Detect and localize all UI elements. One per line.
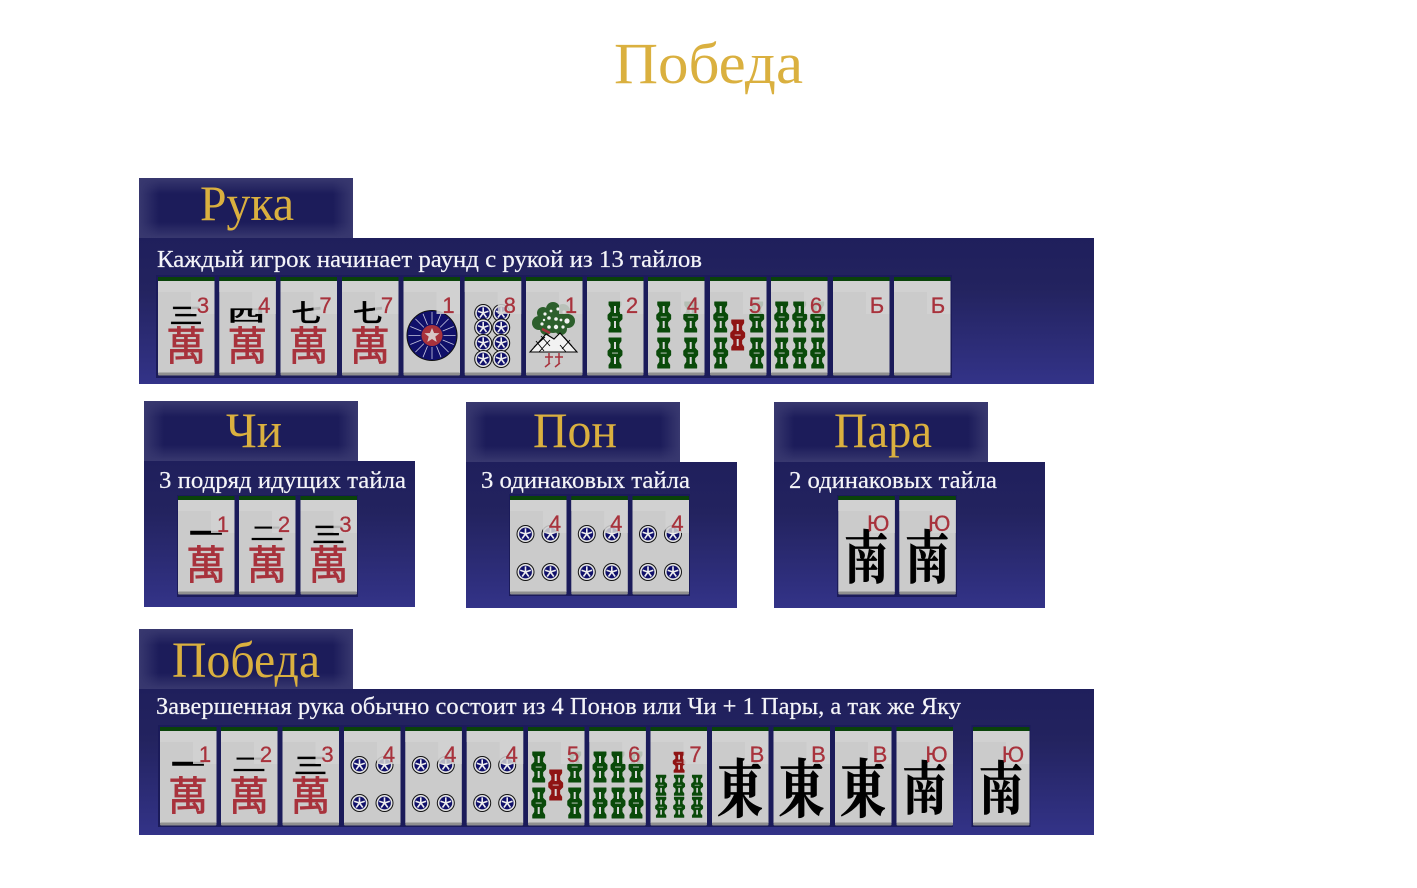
tile: 3 man: 三: [312, 518, 345, 549]
tile: 2 sou: [587, 277, 644, 376]
tile: east wind: 東: [717, 739, 763, 830]
tile: 2 man: 萬: [247, 533, 287, 591]
tile: 3 man: 萬: [308, 533, 348, 591]
tile: 4 man: 萬: [227, 314, 267, 372]
tile: east wind: В: [811, 742, 826, 767]
tile: 4 pin: 4: [671, 511, 684, 536]
tile: 7 man: 七: [291, 293, 322, 329]
pon tab heading: Пон: [533, 402, 617, 458]
tile: 6 sou: 6: [810, 293, 822, 318]
tile: east wind: 東: [778, 739, 825, 830]
tile: 7 man: 萬: [288, 314, 328, 372]
tile: south wind: [838, 496, 895, 595]
tile: 1 pin: 1: [442, 293, 455, 318]
tile: 5 sou: [710, 277, 766, 376]
tile: south wind: [896, 727, 953, 826]
tile: 4 pin: [571, 496, 628, 594]
pon description: 3 одинаковых тайла: [481, 468, 690, 494]
tile: 7 man: 七: [353, 293, 383, 329]
tile: 7 man: [342, 277, 398, 376]
tile: 4 pin: [344, 727, 400, 826]
tile: 3 man: [300, 496, 357, 594]
tile: 4 pin: 4: [610, 511, 622, 536]
tile: 7 man: [280, 277, 337, 376]
tile: 1 pin: [404, 277, 460, 376]
win tab heading: Победа: [172, 633, 320, 689]
tile: 4 pin: 4: [383, 742, 395, 767]
tile: east wind: В: [873, 742, 887, 767]
tile: 3 man: [282, 727, 339, 826]
tile: 4 pin: [632, 496, 689, 594]
tile: 2 man: 萬: [229, 764, 269, 822]
chi tab heading: Чи: [226, 402, 282, 458]
tile: blank: [833, 277, 890, 376]
tile: 1 man: 1: [199, 742, 211, 767]
tile: 2 man: 2: [260, 742, 272, 767]
tile: 2 sou: 2: [626, 293, 638, 318]
tile: 1 man: 1: [217, 512, 229, 537]
tile: 4 pin: 4: [549, 511, 561, 536]
pair tab heading: [774, 402, 988, 462]
tile: 1 man: 萬: [168, 764, 208, 822]
tile: east wind: 東: [840, 739, 886, 830]
pair description: 2 одинаковых тайла: [789, 468, 997, 494]
tile: 6 sou: [771, 277, 828, 376]
hand tab heading: [139, 175, 353, 238]
tile: 2 man: 二: [232, 749, 266, 776]
title: Победа: [614, 31, 803, 96]
tile: 4 pin: [510, 496, 566, 594]
tile: 1 man: 萬: [186, 533, 226, 591]
chi tab heading: [144, 401, 358, 461]
tile: 3 man: 萬: [290, 764, 330, 822]
tile: 3 man: 三: [294, 749, 327, 780]
tile: 2 man: 2: [278, 512, 290, 537]
pair tab heading: Пара: [834, 402, 932, 458]
tile: 1 man: 一: [171, 738, 205, 787]
tile: south wind (pair): 南: [979, 743, 1023, 826]
tile: south wind (pair): Ю: [1002, 742, 1024, 767]
tile: south wind: [899, 496, 956, 595]
pon tab heading: [466, 402, 680, 462]
tile: blank: [894, 277, 950, 376]
tile: 1 man: [178, 496, 234, 594]
tile: 6 sou: 6: [628, 742, 640, 767]
tile: south wind (pair): [973, 727, 1030, 826]
tile: 1 man: 一: [189, 507, 223, 556]
tile: south wind: 南: [903, 743, 946, 826]
win tab heading: [139, 629, 353, 689]
tile: 7 sou: 7: [689, 742, 702, 767]
tile: 8 pin: [465, 277, 521, 376]
tile: 1 man: [160, 727, 216, 826]
tile: 4 sou: [648, 277, 704, 376]
tile: 2 man: [221, 727, 278, 826]
tile: blank: Б: [870, 293, 884, 318]
tile: 3 man: 3: [321, 742, 334, 767]
tile: south wind: 南: [905, 512, 949, 595]
tile: 4 sou: 4: [687, 293, 699, 318]
tile: 3 man: 萬: [166, 314, 206, 372]
tile: 4 man: 四: [228, 302, 265, 327]
tile: 8 pin: 8: [504, 293, 516, 318]
panel: pair: [774, 402, 1045, 608]
tile: south wind: Ю: [928, 511, 950, 536]
panel: pon: [466, 402, 737, 608]
tile: 5 sou: 5: [749, 293, 761, 318]
tile: 4 pin: 4: [506, 742, 518, 767]
tile: 3 man: 三: [169, 299, 203, 330]
tile: 1 sou bird: [526, 277, 582, 376]
tile: 2 man: 二: [250, 518, 284, 545]
tile: east wind: В: [750, 742, 764, 767]
tile: blank: Б: [931, 293, 945, 318]
tile: 4 man: [219, 277, 276, 376]
tile: 7 man: 7: [381, 293, 393, 318]
tile: 4 pin: [405, 727, 462, 826]
hand tab heading: Рука: [200, 175, 294, 231]
hand description: Каждый игрок начинает раунд с рукой из 13 тайлов: [157, 247, 702, 273]
panel: win: [139, 629, 1094, 835]
tile: south wind: 南: [844, 512, 888, 595]
tile: south wind: Ю: [925, 742, 948, 767]
tile: 7 man: 7: [319, 293, 332, 318]
panel: hand: [139, 175, 1094, 384]
tile: 7 man: 萬: [350, 314, 390, 372]
tile: 6 sou: [589, 727, 646, 826]
tile: 4 pin: 4: [444, 742, 456, 767]
chi description: 3 подряд идущих тайла: [159, 468, 406, 494]
tile: 4 man: 4: [258, 293, 270, 318]
win description: Завершенная рука обычно состоит из 4 Понов или Чи + 1 Пары, а так же Яку: [156, 694, 961, 720]
panel: chi: [144, 401, 415, 607]
tile: 4 pin: [467, 727, 523, 826]
tile: 5 sou: [528, 727, 584, 826]
tile: 3 man: 3: [339, 512, 352, 537]
tile: 5 sou: 5: [567, 742, 579, 767]
tile: 3 man: 3: [197, 293, 209, 318]
tile: 1 sou bird: 1: [565, 293, 577, 318]
tile: 3 man: [158, 277, 214, 376]
tile: south wind: Ю: [867, 511, 889, 536]
tile: 2 man: [239, 496, 296, 594]
tile: 7 sou: [650, 727, 707, 826]
